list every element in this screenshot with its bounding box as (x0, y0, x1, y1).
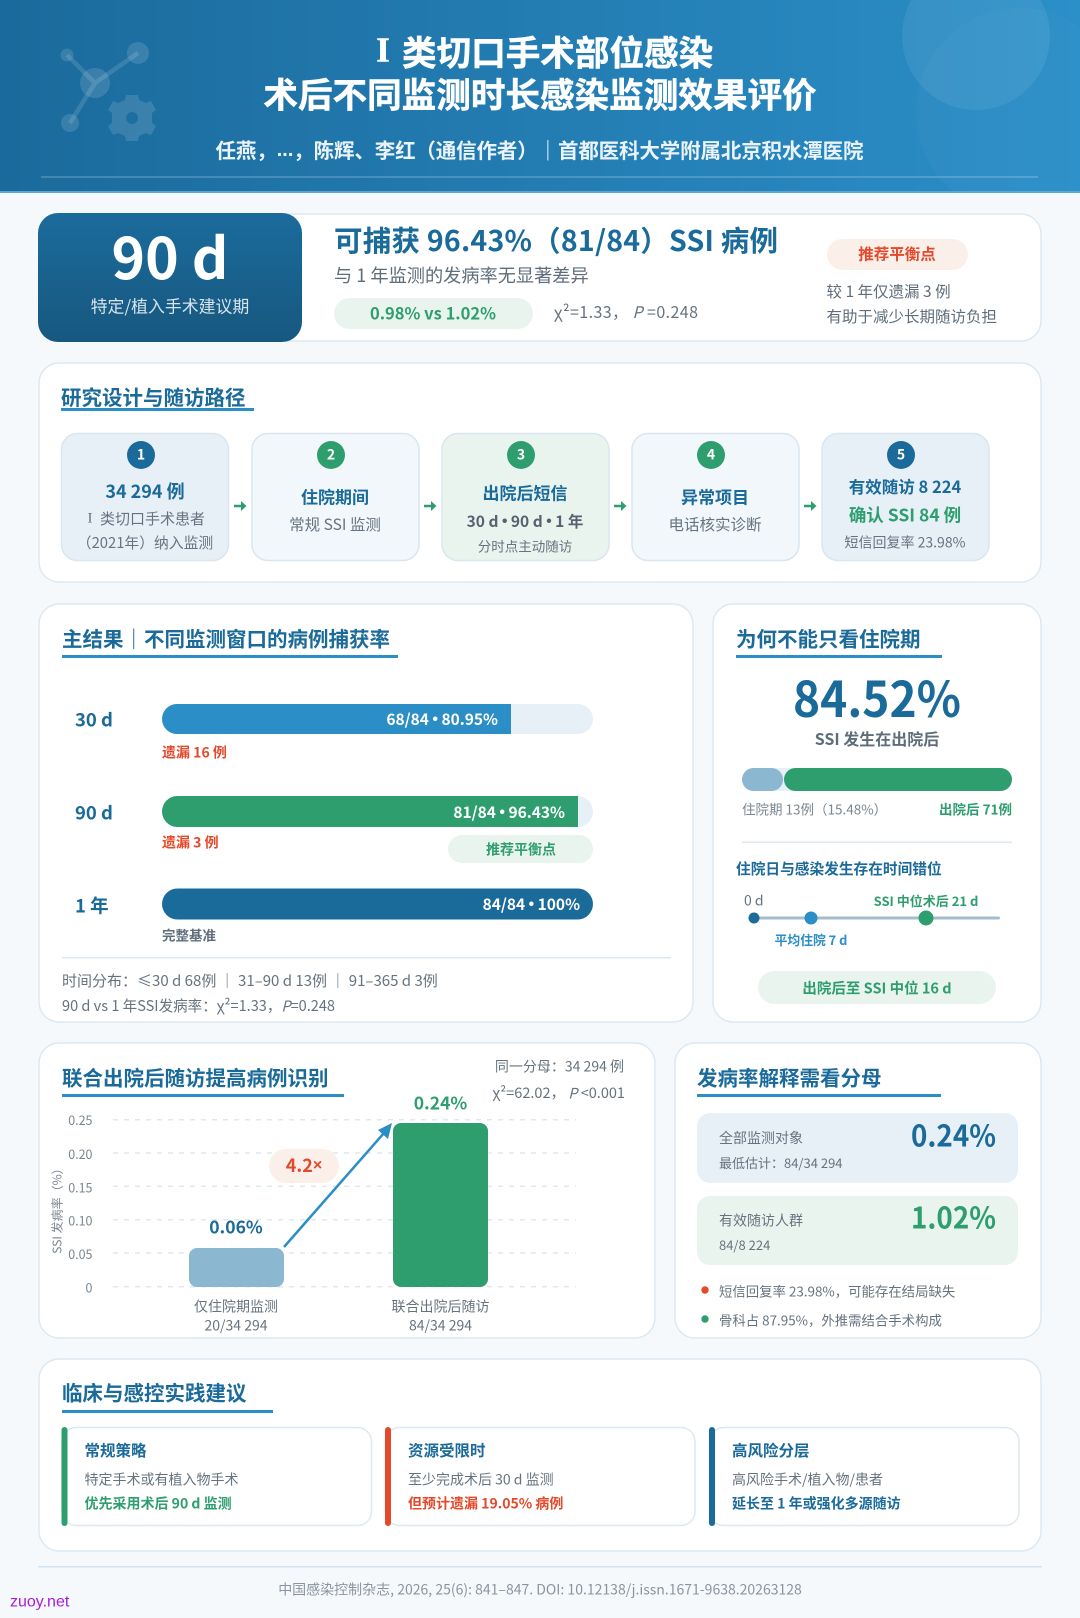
bar: 90 d: 90 d (75, 800, 113, 826)
authors and affiliation: 任燕，...，陈辉、李红（通信作者）｜首都医科大学附属北京积水潭医院 (216, 134, 864, 164)
stat block: 90 d: 90 d (112, 214, 228, 296)
big stat: 84.52% (793, 661, 961, 732)
step 1 (62, 434, 228, 560)
step 1: 34 294 例 (105, 478, 185, 504)
bar: 30 d: 遗漏 16 例 (162, 742, 227, 762)
stat: all monitored: 全部监测对象 (719, 1128, 803, 1148)
bar: 30 d (75, 704, 593, 762)
side note: 有助于减少长期随访负担 (826, 305, 997, 327)
statistics note: χ²=62.02， P <0.001 (493, 1082, 625, 1103)
step 2: 常规 SSI 监测 (289, 513, 381, 535)
bar chart: 0.15 (68, 1177, 93, 1196)
bar chart: 84/34 294 (409, 1315, 472, 1335)
step 1: I (88, 510, 92, 526)
bar chart: 0.05 (68, 1244, 93, 1263)
step 5: 短信回复率 23.98% (844, 532, 966, 552)
time distribution note (62, 970, 438, 1016)
bar: 30 d: 68/84 • 80.95% (386, 708, 498, 730)
card: limited resources (385, 1427, 695, 1526)
bar chart: 0.06% (209, 1215, 263, 1240)
footer citation: 中国感染控制杂志, 2026, 25(6): 841–847. DOI: 10.12138/j.issn.1671-9638.20263128 (278, 1579, 802, 1599)
bar chart: 0 (86, 1277, 93, 1296)
stat: valid follow-up: 84/8 224 (719, 1235, 770, 1254)
timeline (744, 890, 1000, 949)
statistics note (493, 1056, 625, 1103)
panel: denominator (675, 1043, 1041, 1338)
stat block: 90 d (38, 213, 302, 342)
bar: 90 d: 81/84 • 96.43% (453, 801, 565, 823)
badge: 4.2x: 4.2× (286, 1152, 322, 1178)
bar: 30 d: 30 d (75, 707, 113, 733)
bar: 1 year: 完整基准 (162, 924, 216, 944)
heading (697, 1061, 941, 1097)
panel: key finding: 与 1 年监测的发病率无显著差异 (334, 262, 589, 288)
stacked bar: 住院期 13例（15.48%） (742, 798, 887, 818)
title (263, 25, 817, 117)
step 4: 4 (707, 444, 715, 464)
pill: discharge to SSI: 出院后至 SSI 中位 16 d (802, 977, 952, 998)
bar chart: 仅住院期监测 (194, 1296, 278, 1316)
arrow (614, 501, 626, 511)
stat: valid follow-up: 1.02% (911, 1194, 996, 1238)
step 3: 3 (517, 444, 525, 464)
step 2: 2 (327, 444, 335, 464)
step 1: 类切口手术患者 (100, 508, 205, 529)
statistics: χ²=1.33， P =0.248 (554, 299, 698, 323)
stacked bar: 出院后 71例 (939, 798, 1012, 818)
step 5: 确认 SSI 84 例 (849, 503, 961, 528)
step 4 (632, 434, 799, 560)
panel: study design (39, 363, 1041, 582)
pill: incidence comparison (334, 298, 533, 329)
stacked bar (742, 768, 1012, 818)
side note: 较 1 年仅遗漏 3 例 (826, 280, 951, 302)
card: limited resources: 但预计遗漏 19.05% 病例 (408, 1493, 563, 1513)
heading: 研究设计与随访路径 (61, 381, 246, 411)
timeline: 平均住院 7 d (775, 930, 847, 949)
badge: recommended (448, 835, 593, 863)
title: I (376, 31, 390, 69)
pill: incidence comparison: 0.98% vs 1.02% (370, 301, 496, 325)
title: 术后不同监测时长感染监测效果评价 (263, 67, 817, 117)
side note (826, 280, 997, 327)
bar: 1 year: 84/84 • 100% (483, 893, 580, 915)
timeline: 0 d (744, 890, 764, 910)
step 5 (822, 434, 989, 560)
badge: recommended balance: 推荐平衡点 (858, 243, 936, 265)
card: routine strategy: 常规策略 (84, 1439, 147, 1461)
card: high-risk stratification: 高风险分层 (732, 1439, 810, 1461)
step 4: 电话核实诊断 (668, 513, 762, 535)
panel: why not only inpatient (713, 604, 1041, 1022)
arrow: increase (284, 1123, 392, 1247)
time distribution note: 时间分布：≤30 d 68例 ｜ 31–90 d 13例 ｜ 91–365 d 3例 (62, 970, 438, 991)
step 5: 有效随访 8 224 (849, 474, 961, 498)
icon: molecule and gear (60, 42, 156, 141)
stat: valid follow-up (697, 1194, 1018, 1265)
statistics note: 同一分母：34 294 例 (495, 1056, 624, 1076)
card: routine strategy (62, 1427, 372, 1526)
stat: all monitored: 最低估计：84/34 294 (719, 1153, 843, 1172)
step 3: 出院后短信 (482, 480, 568, 505)
bar: 1 year: 1 年 (75, 893, 109, 919)
subheading: 住院日与感染发生存在时间错位 (736, 858, 942, 879)
step 1: 1 (137, 444, 145, 464)
bar: 1 year (75, 888, 593, 944)
heading: 联合出院后随访提高病例识别 (62, 1061, 328, 1091)
headline finding: 可捕获 96.43%（81/84）SSI 病例 (334, 219, 778, 260)
bar: 90 d: 遗漏 3 例 (162, 832, 219, 852)
heading: 为何不能只看住院期 (736, 622, 920, 652)
watermark: zuoy.net (10, 1594, 70, 1611)
header banner (0, 0, 1080, 193)
bar chart: SSI 发病率（%） (48, 1162, 66, 1254)
heading: 发病率解释需看分母 (697, 1061, 882, 1091)
arrow (424, 501, 436, 511)
card: high-risk stratification: 高风险手术/植入物/患者 (732, 1469, 883, 1489)
step 3: 30 d • 90 d • 1 年 (467, 510, 583, 532)
pill: discharge to SSI (758, 971, 996, 1004)
panel: combined follow-up chart (39, 1043, 655, 1338)
badge: 4.2x (269, 1149, 339, 1183)
arrow (234, 501, 246, 511)
panel: key finding (38, 213, 1041, 342)
stat: all monitored: 0.24% (911, 1112, 996, 1156)
timeline: SSI 中位术后 21 d (874, 891, 978, 910)
card: routine strategy: 特定手术或有植入物手术 (84, 1469, 238, 1489)
card: limited resources: 至少完成术后 30 d 监测 (408, 1469, 554, 1489)
step 2 (252, 434, 419, 560)
panel: main result (39, 604, 693, 1022)
badge: recommended balance (827, 239, 968, 270)
bar chart: 联合出院后随访 (392, 1296, 490, 1316)
card: limited resources: 资源受限时 (408, 1439, 486, 1461)
big stat: SSI 发生在出院后 (815, 726, 939, 750)
bar chart: 0.10 (68, 1210, 93, 1229)
card: high-risk stratification: 延长至 1 年或强化多源随访 (732, 1493, 901, 1513)
stat: valid follow-up: 有效随访人群 (719, 1210, 803, 1230)
bar: 90 d (75, 796, 593, 863)
step 3 (442, 434, 609, 560)
card: routine strategy: 优先采用术后 90 d 监测 (84, 1493, 232, 1513)
step 5: 5 (897, 444, 905, 464)
title: 类切口手术部位感染 (402, 25, 713, 75)
bar chart: 20/34 294 (204, 1315, 268, 1335)
bar chart: 0.24% (414, 1091, 467, 1116)
bar chart (48, 1091, 576, 1335)
step 1: （2021年）纳入监测 (77, 532, 213, 553)
step 3: 分时点主动随访 (478, 535, 572, 555)
stat block: 90 d: 特定/植入手术建议期 (91, 293, 249, 318)
badge: recommended: 推荐平衡点 (486, 839, 556, 859)
heading: 临床与感控实践建议 (62, 1376, 247, 1406)
caveat: reply rate: 短信回复率 23.98%，可能存在结局缺失 (719, 1280, 955, 1300)
panel: recommendations (39, 1359, 1041, 1551)
arrow (804, 501, 816, 511)
card: high-risk stratification (709, 1427, 1019, 1526)
heading: 主结果｜不同监测窗口的病例捕获率 (62, 622, 390, 652)
bar chart: 0.20 (68, 1144, 93, 1163)
time distribution note: 90 d vs 1 年SSI发病率：χ²=1.33，P=0.248 (62, 995, 335, 1016)
step 4: 异常项目 (681, 484, 749, 509)
stat: all monitored (697, 1112, 1018, 1183)
step 2: 住院期间 (301, 484, 369, 509)
bar chart: 0.25 (68, 1110, 93, 1129)
caveat: orthopedics: 骨科占 87.95%，外推需结合手术构成 (719, 1309, 942, 1329)
